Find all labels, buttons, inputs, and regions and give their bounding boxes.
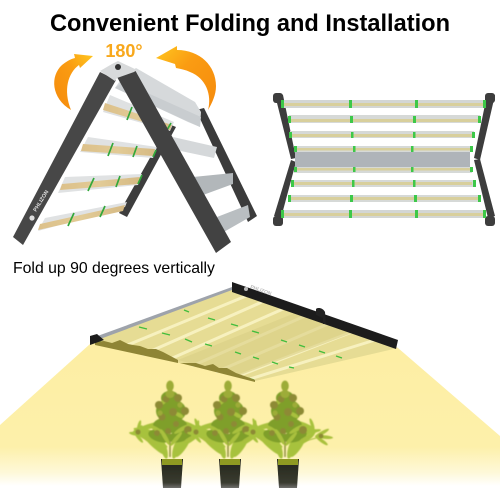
green clips xyxy=(98,310,342,380)
back right leg xyxy=(196,108,257,222)
front right leg xyxy=(117,70,231,253)
plant 2 xyxy=(187,380,264,459)
flat light fixture, top view xyxy=(273,93,495,226)
green clips xyxy=(281,100,486,218)
side frames xyxy=(273,93,495,226)
brand logo on leg xyxy=(29,189,51,221)
brand logo on leg: PHLIZON xyxy=(33,189,51,213)
black side bar xyxy=(232,282,398,349)
plant 3 xyxy=(244,380,321,459)
front LED bar 4 xyxy=(38,202,127,231)
silver top bar xyxy=(115,68,201,127)
folded light fixture xyxy=(13,61,257,253)
pot 3 xyxy=(277,459,299,488)
panel stripes xyxy=(118,296,375,379)
front LED bar 2 xyxy=(80,137,157,158)
center grey panel xyxy=(295,152,470,167)
pot 2 xyxy=(219,459,241,488)
caption: Fold up 90 degrees vertically xyxy=(13,260,215,277)
extra branch on plant 3 xyxy=(305,427,333,446)
front left leg xyxy=(13,72,116,245)
panel surface xyxy=(92,290,398,381)
grey back edge xyxy=(92,287,233,342)
light cone xyxy=(0,290,500,486)
olive front edge, left section xyxy=(95,340,178,363)
bars xyxy=(282,100,485,218)
front LED bar 1 xyxy=(103,95,174,131)
unfolded light fixture xyxy=(90,282,398,382)
brand logo on bar: PHLIZON xyxy=(249,284,272,297)
back left leg xyxy=(119,124,176,217)
plant 1 xyxy=(129,380,206,459)
hinge xyxy=(100,61,137,81)
arrow: left rotation xyxy=(54,54,93,110)
black corner bracket xyxy=(90,334,104,345)
olive front edge, right section xyxy=(180,363,255,382)
title: Convenient Folding and Installation xyxy=(50,10,450,37)
label: 180 degrees: 180° xyxy=(105,41,143,61)
arrow: right rotation xyxy=(156,46,216,110)
front LED bar 3 xyxy=(58,174,142,193)
rear silver bars xyxy=(173,137,250,233)
pot 1 xyxy=(161,459,183,488)
